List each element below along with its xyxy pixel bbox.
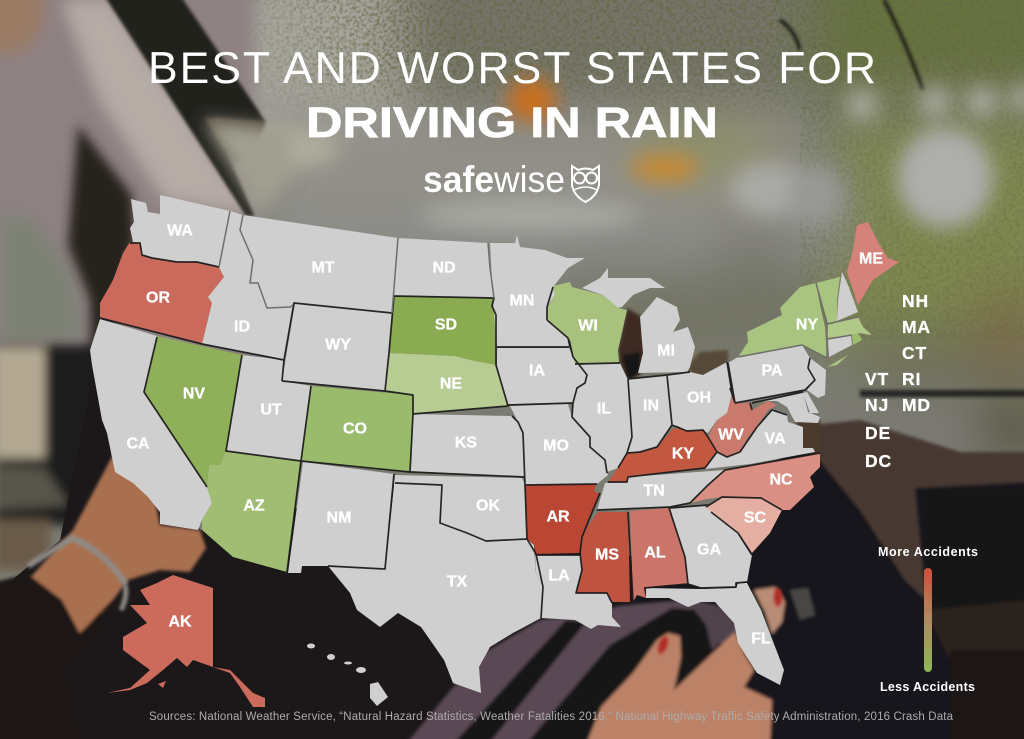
dashboard brown ridge: [812, 420, 1024, 600]
northeast state labels: NH: [902, 291, 929, 311]
state: ME: [847, 222, 899, 305]
state: MN: [490, 235, 585, 347]
state: VT: [816, 277, 840, 323]
state: WY: WY: [325, 336, 351, 354]
legend: More Accidents: [878, 545, 978, 559]
state: MI: MI: [657, 342, 675, 360]
state: NC: NC: [769, 472, 793, 488]
state: IA: [497, 348, 587, 405]
state: ND: [394, 238, 494, 298]
northeast state labels: DC: [865, 451, 892, 471]
state: RI: [852, 333, 862, 345]
state: IL: IL: [597, 400, 611, 418]
left pillar and interior: [0, 0, 255, 355]
state: KS: KS: [455, 434, 477, 452]
state: NM: NM: [327, 510, 351, 526]
state: IN: IN: [643, 398, 659, 414]
northeast state labels: RI: [902, 369, 921, 389]
title line one: BEST AND WORST STATES FOR: [148, 44, 876, 93]
state: WV: [708, 388, 777, 457]
steering wheel: [405, 600, 740, 739]
state: MD: [752, 392, 820, 423]
northeast state labels: DE: [865, 423, 891, 443]
northeast state labels: VT: [865, 369, 889, 389]
state: WA: WA: [167, 222, 193, 240]
state: HI: [307, 644, 388, 706]
state: KY: [608, 427, 717, 482]
legend: [878, 545, 978, 694]
red nails: [656, 588, 782, 655]
state: AL: [630, 508, 688, 602]
state: GA: GA: [697, 542, 721, 558]
state: SC: SC: [744, 510, 767, 526]
state: IA: IA: [529, 362, 545, 380]
state: LA: [535, 555, 621, 629]
state: VA: VA: [764, 430, 786, 448]
state: NY: NY: [796, 316, 818, 334]
state: FL: [646, 583, 784, 685]
state: UT: [226, 355, 311, 461]
state: NJ: [807, 358, 826, 398]
state: UT: UT: [260, 402, 282, 418]
state: CO: CO: [343, 420, 367, 438]
dark cabin lower area: [0, 340, 640, 739]
state: WA: [130, 195, 230, 267]
dashboard vents: [925, 490, 1024, 610]
state: TN: TN: [643, 482, 665, 500]
state: PA: [728, 345, 815, 403]
state: MI: [582, 268, 695, 373]
northeast state labels: CT: [902, 343, 927, 363]
map of the United States: [90, 195, 899, 707]
state: IL: [572, 363, 632, 472]
state: WI: [547, 282, 627, 364]
state: ID: ID: [234, 318, 250, 336]
dashboard button: [790, 588, 815, 620]
state: SC: [706, 497, 782, 553]
state: NV: NV: [183, 386, 205, 402]
bracelets: [28, 538, 126, 610]
state: NM: [288, 462, 394, 573]
state: SD: SD: [435, 316, 457, 334]
state: CA: [90, 319, 212, 530]
state: ND: ND: [432, 260, 456, 276]
northeast state labels: MD: [902, 395, 931, 415]
state: NC: [690, 453, 820, 510]
state: MS: MS: [595, 546, 619, 564]
state: FL: FL: [751, 630, 771, 648]
state: OH: [667, 362, 732, 433]
state: WV: WV: [718, 426, 744, 444]
northeast state labels: [865, 291, 931, 471]
state: KS: [410, 414, 525, 477]
windshield streaks: [780, 0, 923, 90]
state: WY: [282, 303, 392, 391]
northeast state labels: NJ: [865, 395, 889, 415]
logo: safewise: safewise: [423, 159, 565, 200]
state: OR: [100, 242, 224, 344]
state: IN: [627, 375, 672, 453]
state: AK: AK: [168, 614, 192, 630]
state: MA: [827, 317, 872, 338]
lakes and gaps: [618, 308, 645, 382]
state: NH: [837, 272, 858, 321]
title: [148, 44, 876, 147]
state: AR: AR: [546, 508, 570, 526]
state: CA: CA: [126, 436, 150, 452]
title line two: DRIVING IN RAIN: [306, 99, 718, 147]
hand on wheel: [586, 632, 772, 739]
state: DE: [803, 392, 819, 413]
state: NE: [385, 353, 508, 414]
state: AL: AL: [644, 544, 666, 562]
state: AZ: [202, 451, 301, 572]
state: AK: [107, 575, 265, 707]
state: WI: WI: [578, 318, 598, 334]
state: MO: MO: [543, 438, 569, 454]
state: LA: LA: [548, 568, 570, 584]
state: OK: OK: [476, 498, 500, 514]
pillar shadow: [68, 125, 135, 400]
chesapeake shadow: [795, 415, 820, 452]
state: MO: [510, 404, 608, 485]
sources: Sources: National Weather Service, “Natural Hazard Statistics, Weather Fatalities 2016,” National Highway Traffic Safety Administration, 2016 Crash Data: [149, 711, 954, 723]
windshield rain speckle: [254, 0, 1024, 116]
state: TN: [597, 470, 725, 510]
state: OK: [395, 475, 527, 541]
state: PA: PA: [761, 362, 783, 380]
legend gradient bar: [924, 568, 932, 672]
state: ID: [202, 211, 293, 360]
state: ME: ME: [859, 250, 883, 268]
state: OR: OR: [146, 290, 170, 306]
state: GA: [670, 505, 752, 588]
state: AR: [525, 484, 600, 554]
state: NE: NE: [440, 376, 462, 392]
state: AZ: AZ: [243, 498, 265, 514]
state: NY: [738, 283, 848, 367]
state: VA: [705, 410, 815, 469]
northeast state labels: MA: [902, 317, 931, 337]
state: MN: MN: [510, 292, 534, 310]
state: MT: [240, 215, 398, 313]
state: TX: TX: [447, 574, 468, 590]
state: CT: [828, 335, 852, 357]
state: TX: [328, 476, 543, 693]
left hand and forearm: [30, 455, 206, 633]
state: SD: [389, 296, 496, 365]
state: MS: [576, 512, 630, 602]
state: MT: MT: [311, 260, 335, 276]
icon: owl: [572, 166, 599, 202]
legend: Less Accidents: [880, 680, 975, 694]
state: CO: [301, 386, 413, 472]
state: NV: [144, 336, 242, 487]
state: KY: KY: [672, 446, 694, 462]
state: OH: OH: [687, 390, 711, 406]
